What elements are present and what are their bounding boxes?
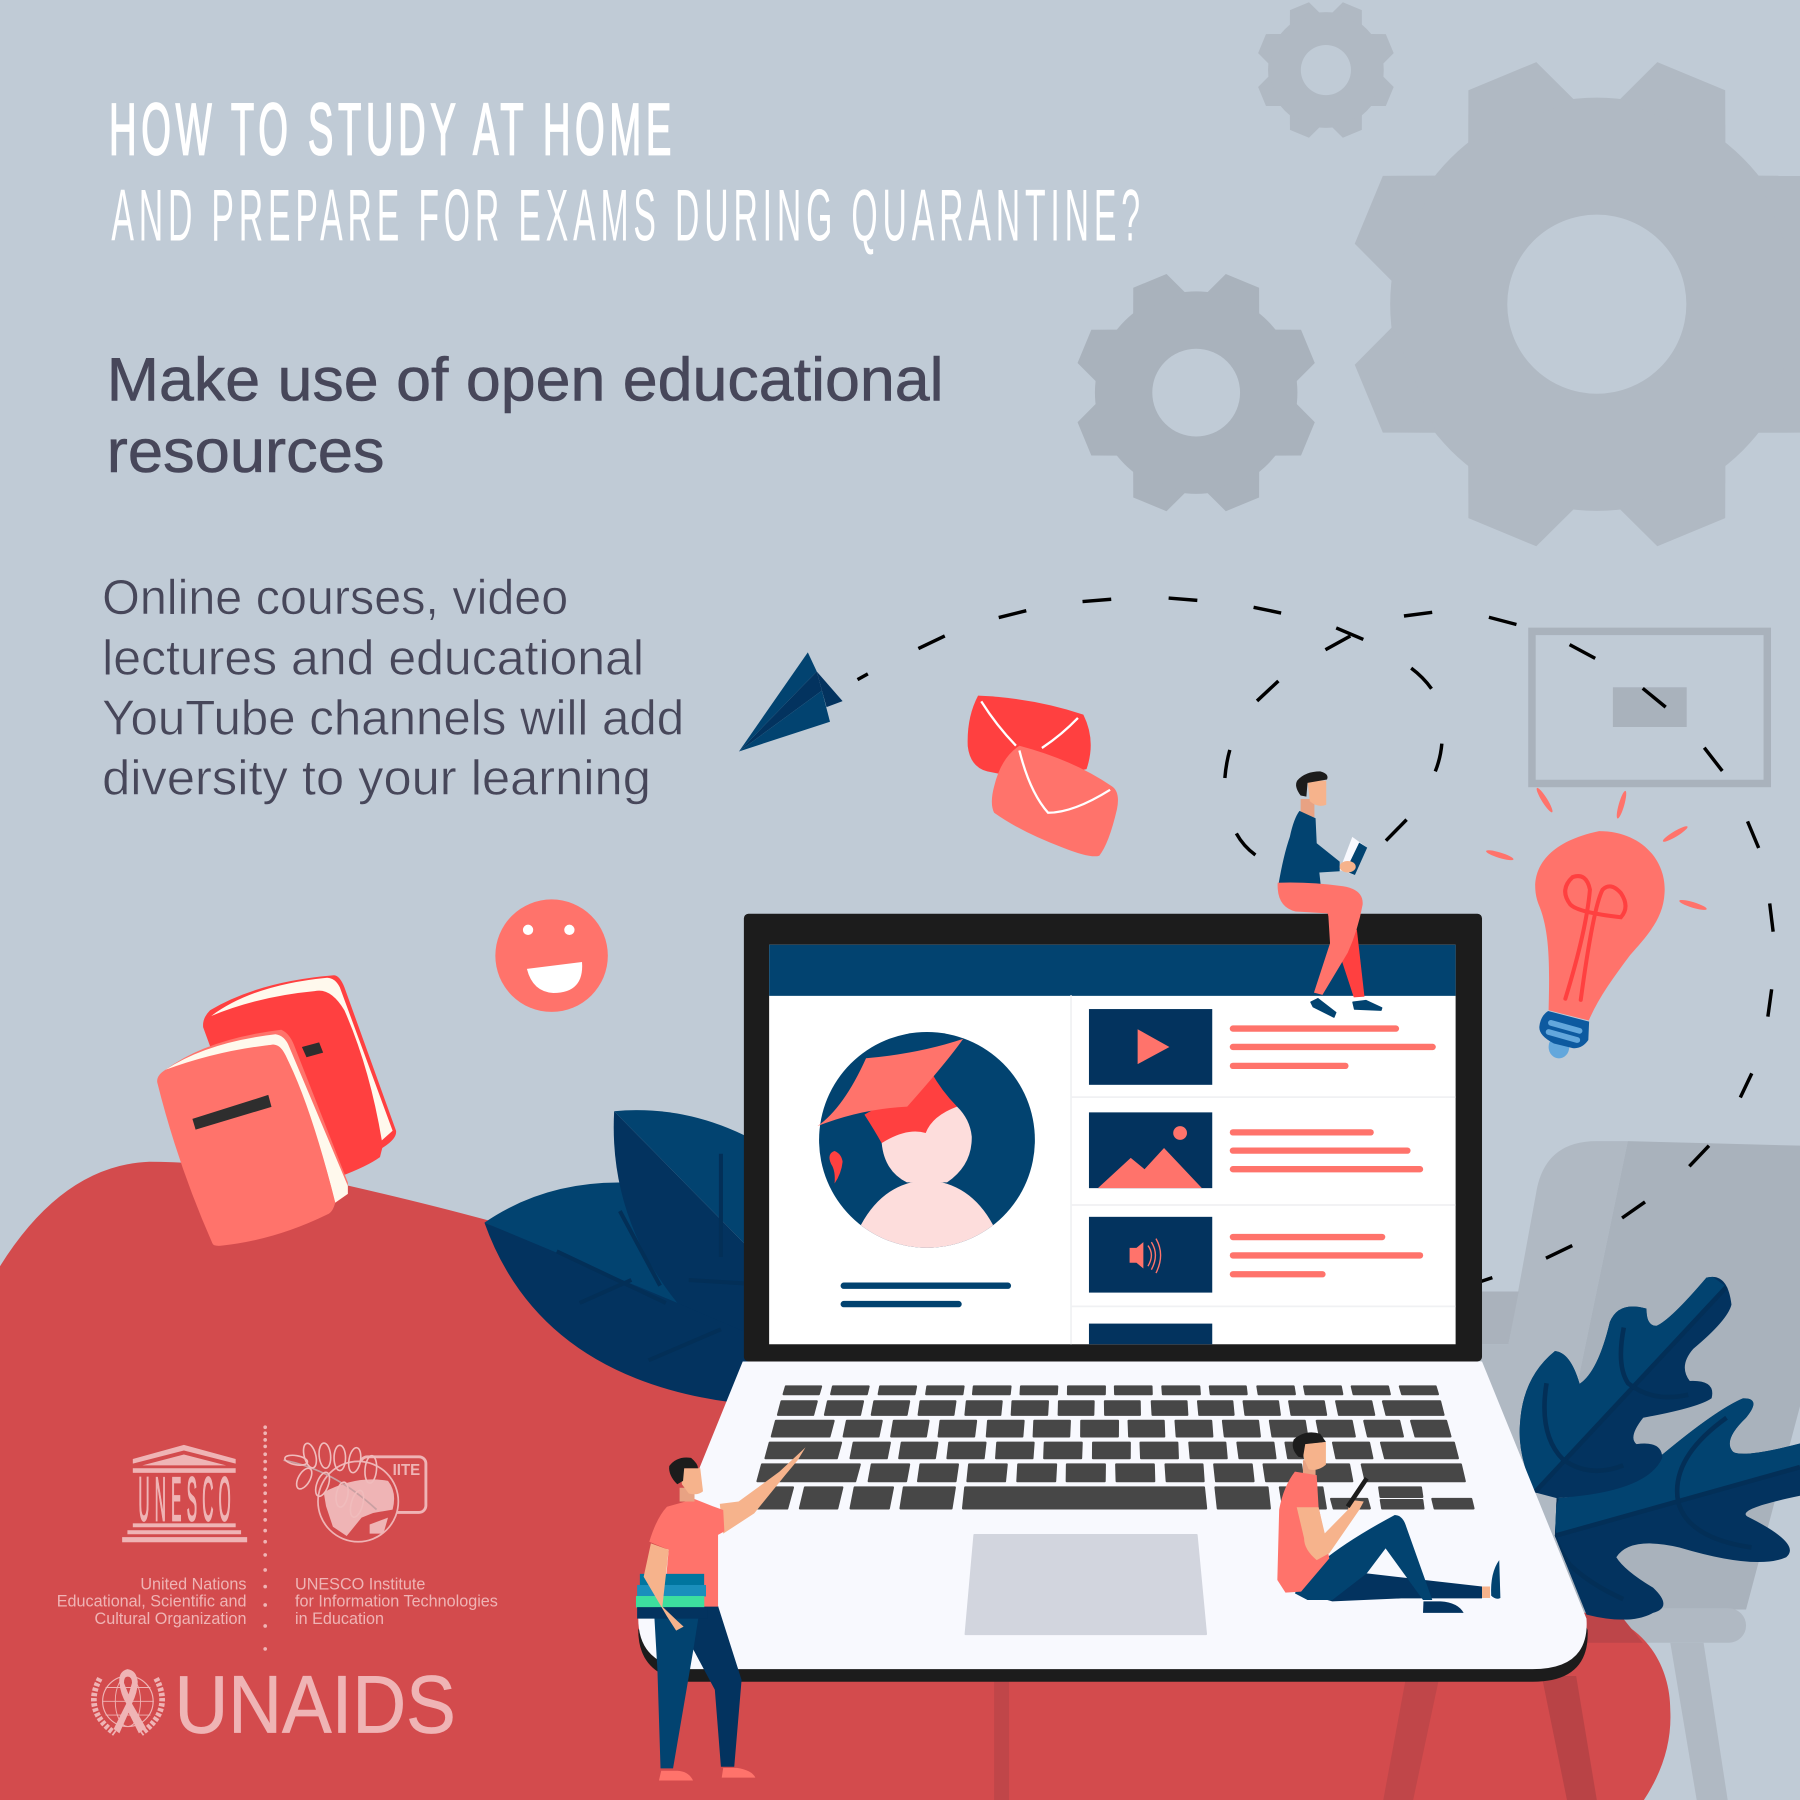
stack of books bbox=[636, 1574, 707, 1619]
icon: books bbox=[157, 975, 396, 1246]
red hill bbox=[0, 1162, 1670, 1800]
IITE caption: for Information Technologies bbox=[295, 1593, 498, 1611]
person: sitting on keyboard deck bbox=[1277, 1432, 1500, 1613]
body text: Online courses, video bbox=[102, 570, 568, 625]
trackpad bbox=[965, 1535, 1206, 1634]
icon: large gear bbox=[1347, 54, 1800, 554]
logo: UNAIDS emblem bbox=[94, 1669, 162, 1733]
logo: IITE bbox=[284, 1442, 426, 1542]
title: HOW TO STUDY AT HOME bbox=[109, 89, 671, 171]
keyboard bbox=[754, 1386, 1474, 1508]
dashed flight path bbox=[858, 598, 1773, 1282]
heading: Make use of open educational bbox=[107, 346, 944, 414]
icon: paper plane bbox=[739, 652, 843, 751]
logo: UNESCO bbox=[122, 1445, 247, 1542]
chair bbox=[1481, 1141, 1800, 1800]
wall frame bbox=[1532, 631, 1767, 783]
cropped thumbnail bbox=[1089, 1324, 1212, 1344]
title: AND PREPARE FOR EXAMS DURING QUARANTINE? bbox=[111, 175, 1140, 257]
IITE caption: UNESCO Institute bbox=[295, 1575, 425, 1593]
video thumbnail bbox=[1089, 1009, 1212, 1085]
person: reading on screen bbox=[1278, 771, 1382, 1017]
dotted divider bbox=[263, 1425, 267, 1651]
title bbox=[109, 89, 1140, 257]
IITE caption: in Education bbox=[295, 1610, 384, 1628]
avatar caption bars bbox=[844, 1286, 1008, 1304]
icon: left leaves bbox=[484, 1110, 758, 1403]
body text: lectures and educational bbox=[102, 630, 644, 685]
UNESCO caption: Educational, Scientific and bbox=[57, 1593, 246, 1611]
body text: YouTube channels will add bbox=[102, 691, 684, 746]
avatar bbox=[817, 1032, 1035, 1251]
table shadows on red bbox=[994, 1613, 1643, 1800]
icon: envelopes bbox=[968, 696, 1118, 856]
logo: UNESCO: UNESCO bbox=[138, 1464, 231, 1534]
laptop base shadow bbox=[638, 1374, 1588, 1682]
IITE caption bbox=[295, 1575, 498, 1628]
icon: small gear bbox=[1256, 0, 1396, 140]
laptop base bbox=[638, 1361, 1587, 1669]
UNESCO caption bbox=[57, 1575, 246, 1628]
laptop screen frame bbox=[744, 914, 1482, 1361]
row dividers bbox=[1071, 995, 1456, 1344]
body text: diversity to your learning bbox=[102, 750, 651, 805]
logo: IITE: IITE bbox=[393, 1461, 420, 1479]
laptop bbox=[638, 914, 1588, 1682]
UNESCO caption: Cultural Organization bbox=[95, 1610, 246, 1628]
icon: smiley bbox=[495, 899, 608, 1012]
UNESCO caption: United Nations bbox=[140, 1575, 246, 1593]
logo: UNAIDS wordmark: UNAIDS bbox=[174, 1659, 456, 1750]
screen content bbox=[769, 945, 1456, 1344]
person: standing with books bbox=[636, 1447, 806, 1780]
text bars bbox=[1233, 1029, 1433, 1274]
icon: light bulb bbox=[1485, 786, 1708, 1058]
icon: medium gear bbox=[1074, 270, 1319, 515]
screen header bbox=[769, 945, 1456, 996]
image thumbnail bbox=[1089, 1112, 1212, 1188]
heading bbox=[107, 346, 944, 485]
heading: resources bbox=[107, 417, 385, 485]
audio thumbnail bbox=[1089, 1217, 1212, 1293]
body text bbox=[102, 570, 684, 805]
icon: right leaves bbox=[1520, 1276, 1800, 1620]
